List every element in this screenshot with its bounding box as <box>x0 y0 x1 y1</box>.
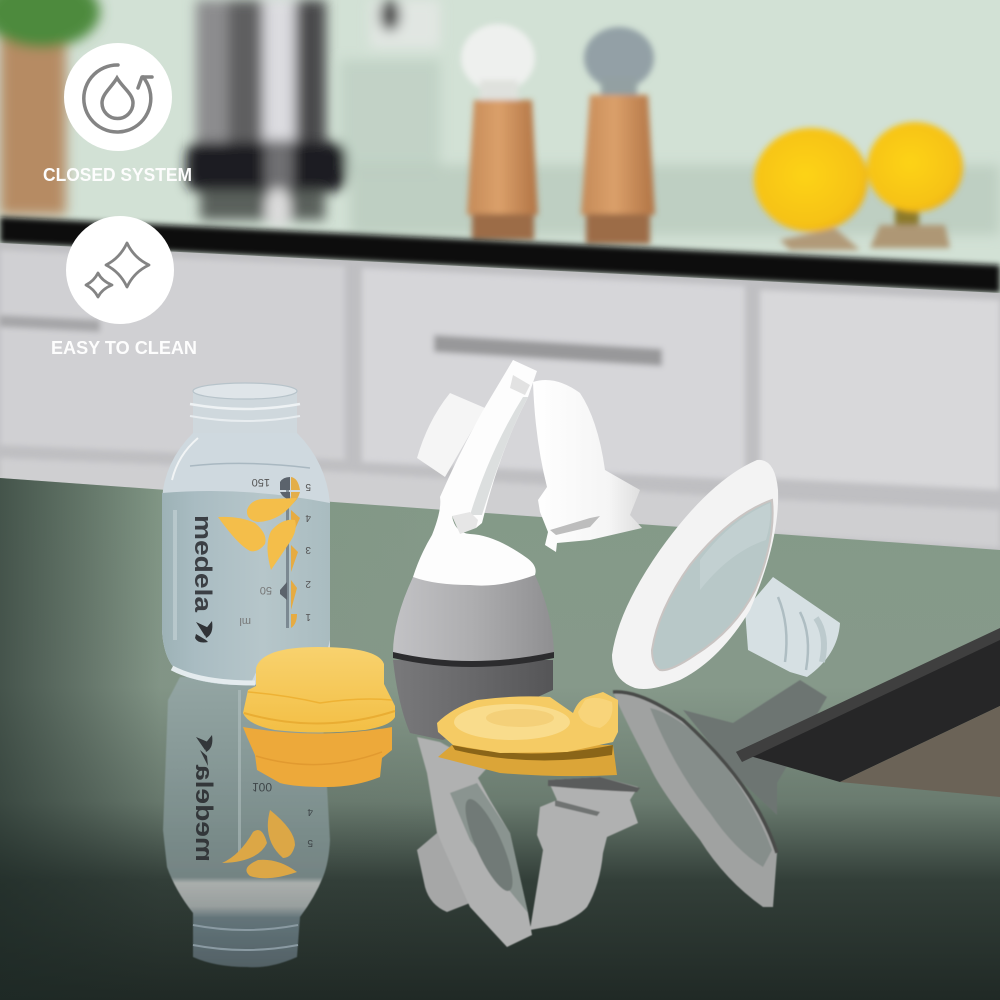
yellow valve membrane <box>437 692 618 753</box>
reflected housing <box>530 777 638 930</box>
pump: grey base <box>393 575 554 667</box>
flange lens <box>652 500 773 670</box>
tube stub <box>417 393 485 477</box>
scale markings: ml <box>239 615 251 627</box>
pump: white head and connector <box>413 360 642 586</box>
scale markings: 3 <box>305 544 311 555</box>
bottle body <box>162 433 330 685</box>
background: kitchen counter and objects <box>0 0 1000 293</box>
reflected tube <box>417 833 470 912</box>
reflection: bottle <box>163 677 330 967</box>
flange <box>612 460 778 689</box>
breast shield <box>612 460 840 689</box>
label: closed system: CLOSED SYSTEM <box>43 165 192 185</box>
reflection: scale: 100 <box>252 780 272 794</box>
logo petals <box>218 517 266 551</box>
label: easy to clean: EASY TO CLEAN <box>51 338 197 358</box>
icon: closed system <box>64 43 172 151</box>
scale markings: 50 <box>260 584 272 596</box>
scale markings: 150 <box>252 476 270 488</box>
bottle neck <box>193 384 297 433</box>
scale markings: 5 <box>305 481 311 492</box>
lemons <box>754 122 963 250</box>
reflection: small logo <box>196 735 212 766</box>
icon: easy to clean <box>66 216 174 324</box>
yellow bottle cap <box>243 647 395 732</box>
scale markings <box>239 476 311 628</box>
reflection: pump base <box>393 660 553 740</box>
logo text: medela <box>189 515 216 613</box>
scale markings: 2 <box>305 578 311 589</box>
dark cloth at right <box>736 628 1000 797</box>
reflection: logo text: medela <box>190 764 217 862</box>
reflection: bottle: 4 <box>307 806 313 817</box>
stem <box>745 577 840 677</box>
reflection: pump head <box>417 737 640 947</box>
scale markings: 1 <box>305 611 311 622</box>
background: cabinets <box>0 243 1000 560</box>
glossy table <box>0 478 1000 1000</box>
reflection: breast shield <box>613 680 827 907</box>
small logo <box>195 621 212 642</box>
membrane housing <box>533 380 642 552</box>
background: kitchen wall <box>0 0 1000 300</box>
reflection: petals <box>222 810 297 878</box>
scale markings: 4 <box>305 512 311 523</box>
baby bottle <box>162 383 330 685</box>
reflected arm and ring <box>417 737 532 947</box>
reflection: yellow parts <box>243 727 617 787</box>
dark worktop edge <box>0 217 1000 293</box>
arm, lower body and ring <box>413 360 537 586</box>
reflection: bottle: 5 <box>307 837 313 848</box>
pepper mills <box>461 24 655 244</box>
